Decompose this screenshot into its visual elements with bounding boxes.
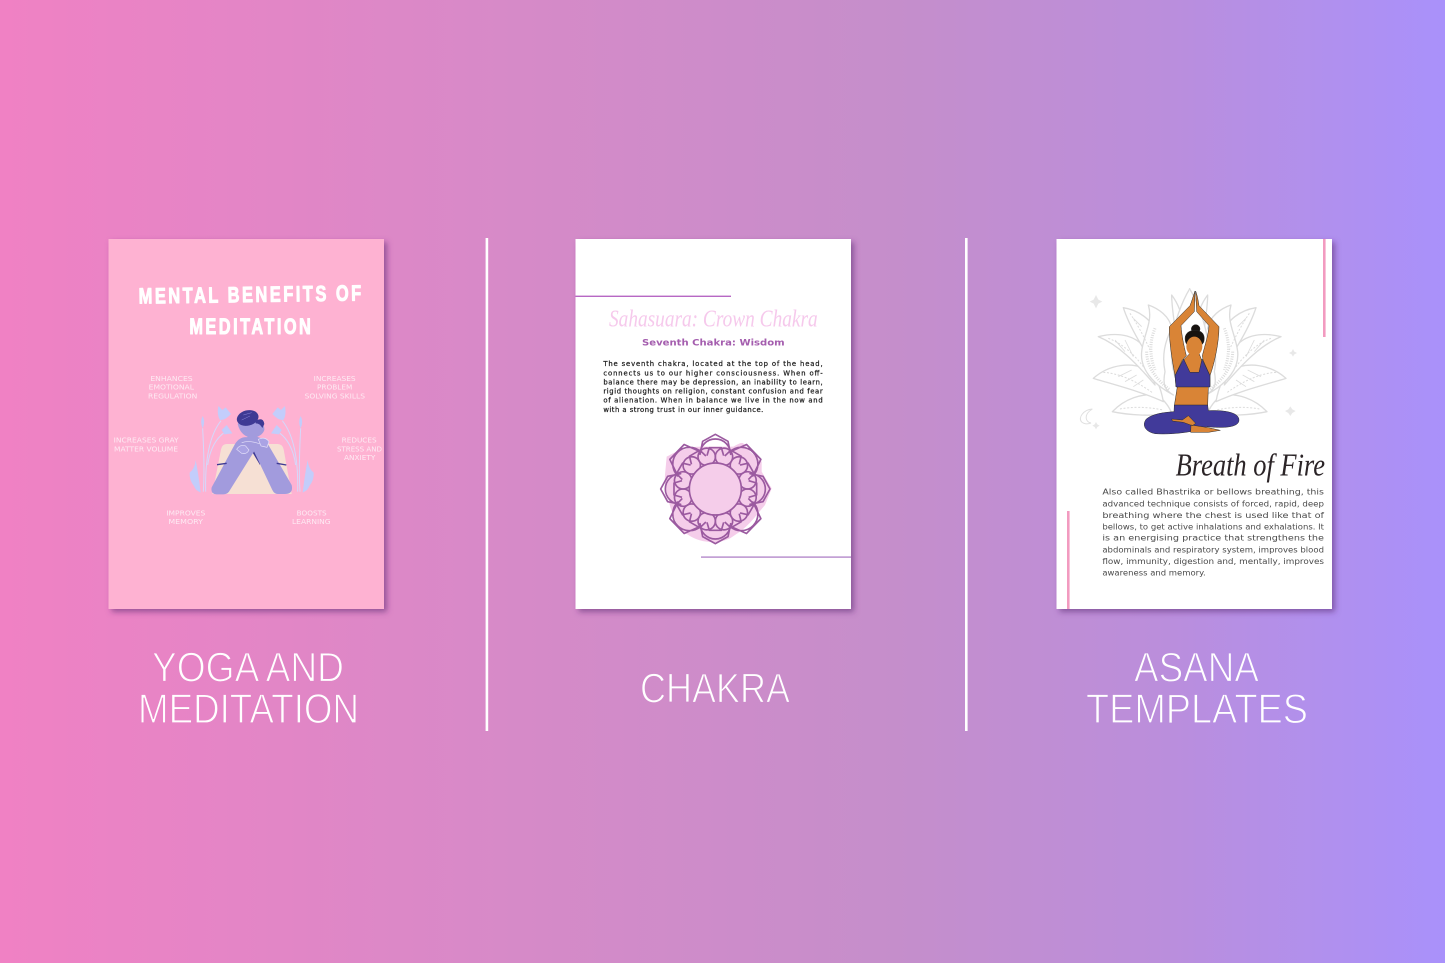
- asana description: Also called Bhastrika or bellows breathing, this: [1102, 487, 1324, 497]
- benefit labels: STRESS AND: [337, 445, 382, 453]
- panel: mental benefits of meditation: [108, 239, 384, 609]
- benefit labels: MATTER VOLUME: [114, 445, 178, 453]
- asana description: bellows, to get active inhalations and exhalations. It: [1102, 521, 1325, 531]
- benefit labels: MEMORY: [168, 518, 204, 526]
- benefit labels: LEARNING: [292, 518, 331, 526]
- asana description: is an energising practice that strengthens the: [1102, 533, 1324, 543]
- divider left: [486, 238, 488, 731]
- caption: yoga and meditation: MEDITATION: [138, 685, 359, 732]
- caption: yoga and meditation: [138, 644, 359, 732]
- benefit labels: SOLVING SKILLS: [305, 393, 366, 401]
- benefit labels: INCREASES: [314, 375, 356, 383]
- caption: asana templates: [1086, 644, 1308, 732]
- panel: crown chakra: [576, 239, 851, 609]
- lotus line art: [1080, 288, 1297, 429]
- chakra title: Sahasuara: Crown Chakra: [609, 306, 818, 332]
- chakra description: connects us to our higher consciousness. When off-: [603, 369, 823, 377]
- benefit labels: EMOTIONAL: [149, 384, 194, 392]
- chakra description: [602, 360, 823, 414]
- panel title: [139, 280, 364, 339]
- bottom accent line: [701, 556, 851, 558]
- benefit labels: REDUCES: [342, 437, 377, 445]
- caption: yoga and meditation: YOGA AND: [152, 644, 344, 690]
- crown chakra mandala: [661, 434, 772, 544]
- benefit labels: ENHANCES: [150, 375, 193, 383]
- asana description: flow, immunity, digestion and, mentally, improves: [1102, 556, 1324, 566]
- benefit labels: [114, 375, 382, 526]
- asana description: abdominals and respiratory system, improves blood: [1102, 544, 1324, 554]
- benefit labels: BOOSTS: [297, 509, 327, 517]
- asana description: awareness and memory.: [1102, 567, 1206, 577]
- benefit labels: ANXIETY: [344, 454, 376, 462]
- panel title: MEDITATION: [189, 314, 313, 339]
- asana title: Breath of Fire: [1176, 446, 1325, 482]
- benefit labels: PROBLEM: [317, 384, 352, 392]
- panel: breath of fire asana: [1056, 239, 1332, 609]
- panel title: MENTAL BENEFITS OF: [139, 280, 364, 309]
- chakra description: The seventh chakra, located at the top of the head,: [602, 360, 823, 368]
- asana description: breathing where the chest is used like that of: [1102, 510, 1325, 520]
- chakra description: balance there may be depression, an inability to learn,: [603, 378, 823, 386]
- chakra description: of alienation. When in balance we live in the now and: [603, 397, 823, 405]
- chakra subtitle: Seventh Chakra: Wisdom: [642, 339, 785, 349]
- asana description: [1102, 487, 1325, 577]
- illustration: meditating person with flowers: [190, 406, 314, 494]
- caption: chakra: CHAKRA: [640, 664, 790, 712]
- divider right: [965, 238, 968, 731]
- benefit labels: IMPROVES: [166, 509, 206, 517]
- benefit labels: REGULATION: [148, 393, 197, 401]
- top right accent bar: [1323, 239, 1326, 337]
- asana description: advanced technique consists of forced, rapid, deep: [1102, 498, 1324, 508]
- seated yoga figure: [1144, 291, 1239, 434]
- caption: asana templates: TEMPLATES: [1086, 685, 1308, 732]
- bottom left accent bar: [1067, 511, 1070, 609]
- top accent line: [576, 296, 731, 297]
- benefit labels: INCREASES GRAY: [114, 437, 179, 445]
- chakra description: rigid thoughts on religion, constant confusion and fear: [603, 388, 823, 396]
- chakra description: with a strong trust in our inner guidance.: [603, 406, 763, 414]
- caption: asana templates: ASANA: [1134, 644, 1259, 690]
